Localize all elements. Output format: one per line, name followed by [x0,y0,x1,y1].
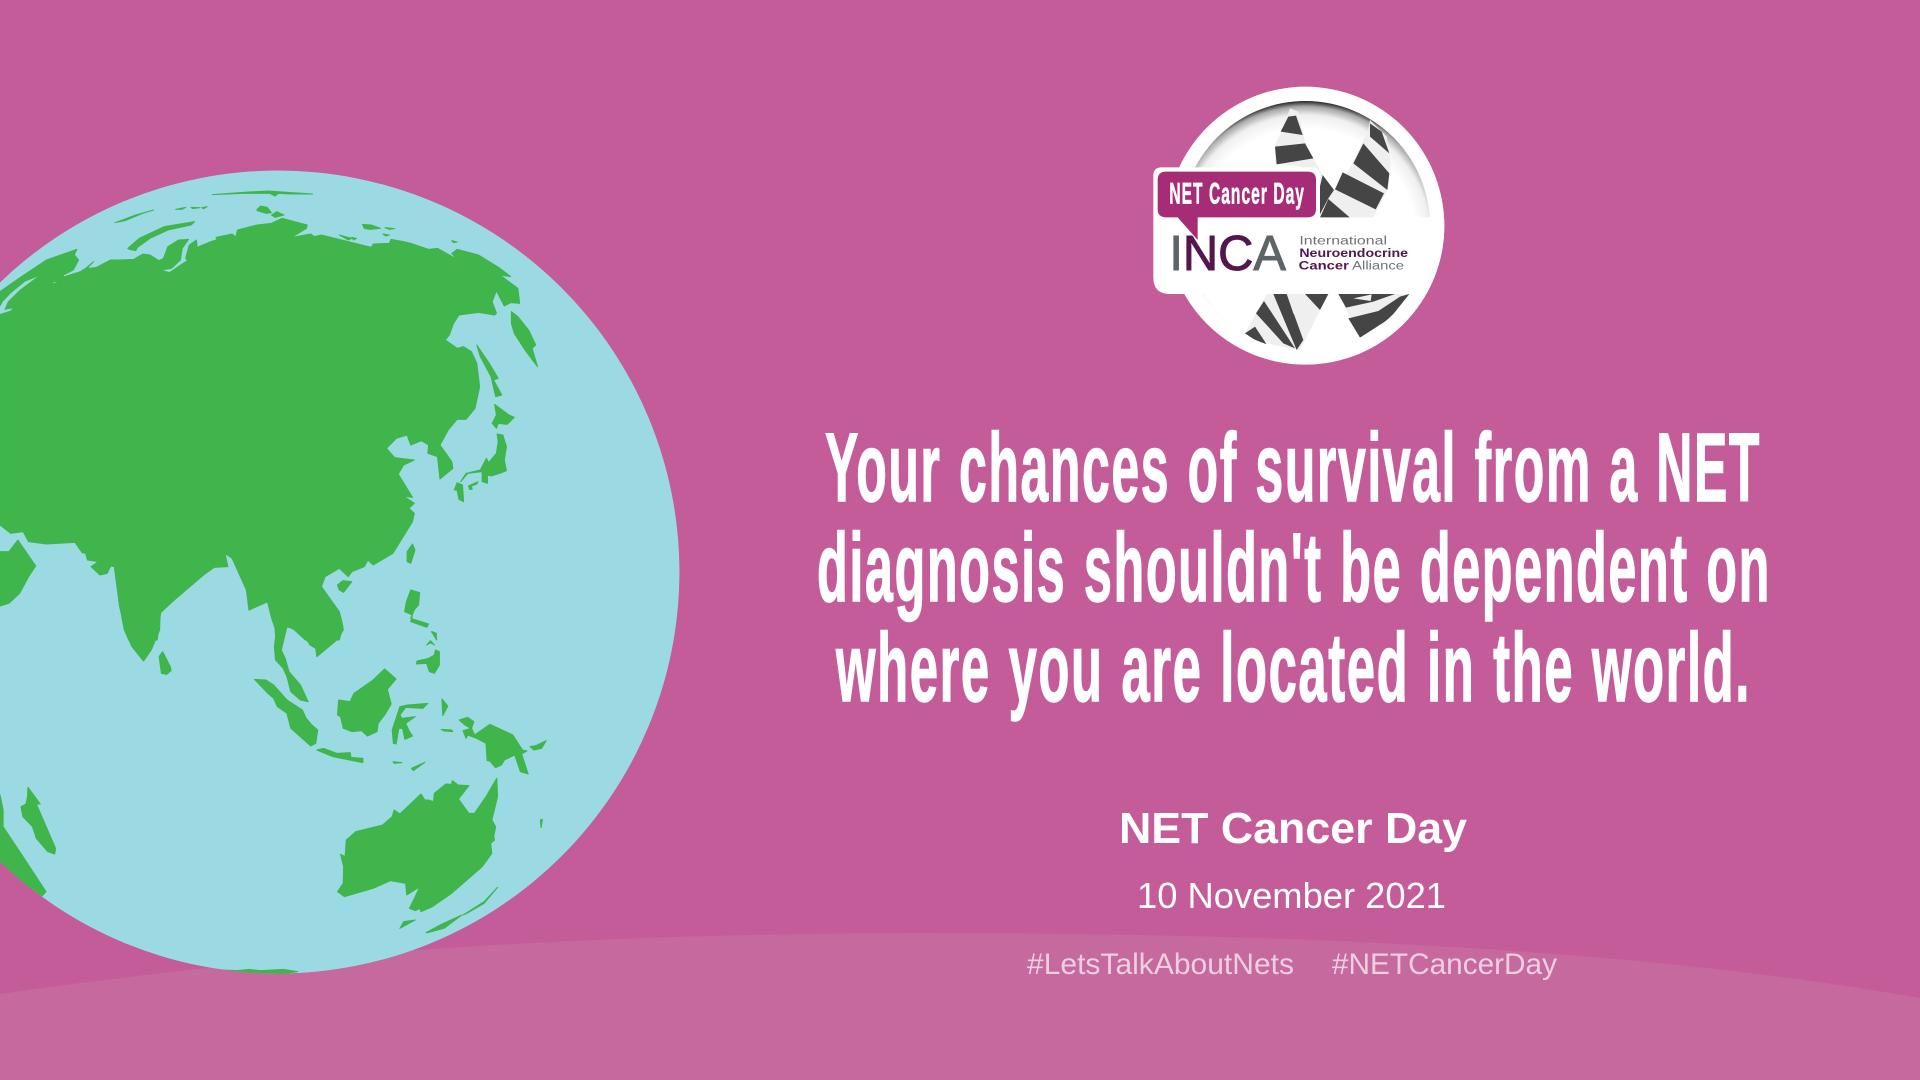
alliance name [1299,233,1408,272]
alliance name: Cancer Alliance [1299,258,1404,272]
INCA wordmark: INCA [1169,226,1286,281]
hashtags: #LetsTalkAboutNets [1027,948,1294,981]
ocean disc [0,170,680,974]
badge white ring [1166,87,1444,365]
globe illustration [0,170,680,975]
badge inner shaded disc [1181,101,1430,350]
alliance name: Neuroendocrine [1299,246,1408,260]
headline [817,413,1771,722]
continents: Asia and northern islands [0,191,537,640]
speech bubble [1158,172,1316,240]
hashtags: #NETCancerDay [1332,948,1557,981]
event name: NET Cancer Day [1119,804,1468,853]
logo: INCA NET Cancer Day badge [1153,87,1444,365]
icon: zebra ribbon [1245,108,1410,350]
alliance name: International [1299,233,1387,247]
background hill [0,933,1920,1080]
bubble text: NET Cancer Day [1169,177,1305,210]
badge white banner [1153,167,1444,294]
hashtags [1027,948,1557,981]
event date: 10 November 2021 [1137,875,1446,916]
continents: India, Indonesia, Australia, Africa [0,600,546,975]
